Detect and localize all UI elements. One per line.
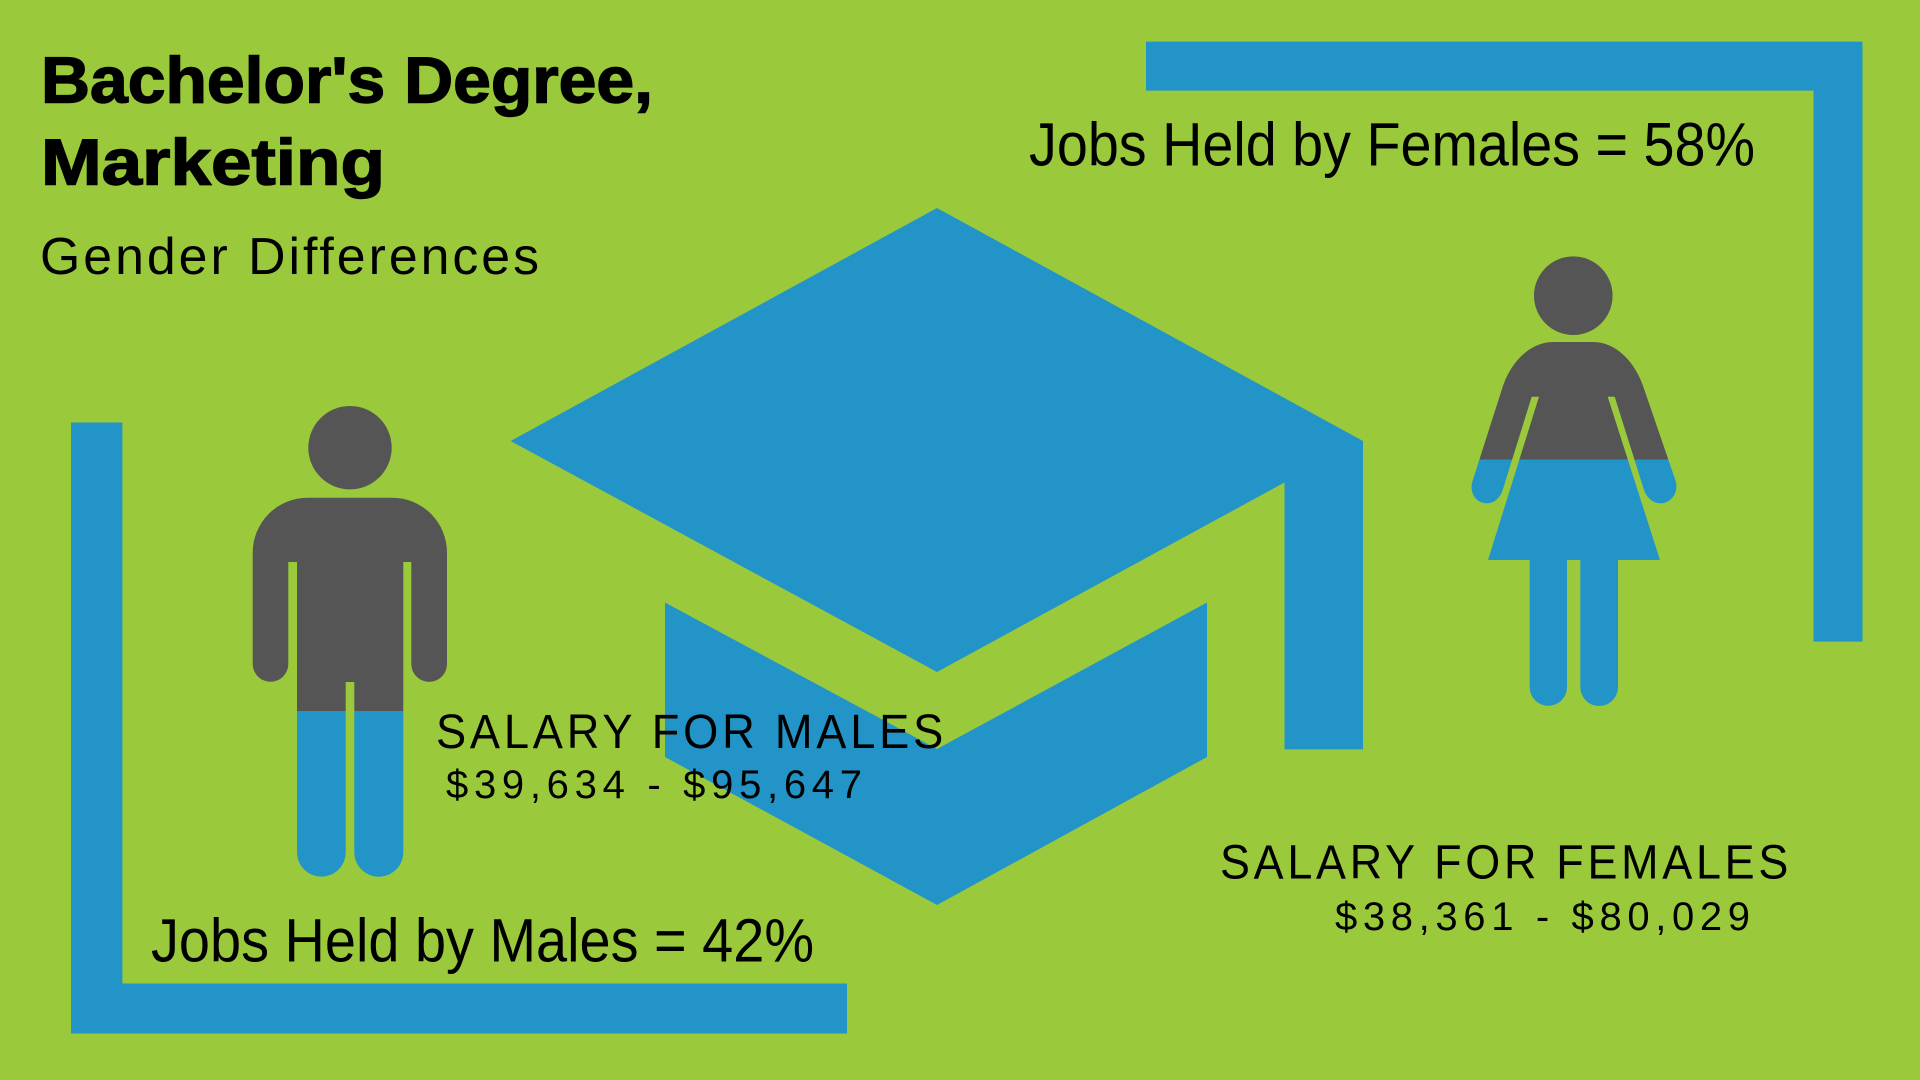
frame: bottom-left corner bracket: [71, 422, 847, 1034]
frame: top-right corner bracket: [1146, 42, 1862, 642]
icon: graduation cap: [511, 208, 1363, 905]
label: salary for females: SALARY FOR FEMALES: [1220, 836, 1792, 890]
title: [41, 44, 653, 198]
title: Marketing: [41, 126, 385, 198]
value: male salary range: $39,634 - $95,647: [446, 763, 862, 807]
icon: female figure 58% filled: [1472, 256, 1676, 706]
title: Bachelor's Degree,: [41, 44, 653, 116]
value: female salary range: $38,361 - $80,029: [1335, 895, 1750, 939]
label: salary for males: SALARY FOR MALES: [436, 706, 947, 759]
icon: male figure 42% filled: [253, 406, 447, 877]
stat: jobs held by males: Jobs Held by Males = 42%: [151, 906, 814, 974]
subtitle: Gender Differences: [40, 228, 542, 286]
stat: jobs held by females: Jobs Held by Females = 58%: [1029, 110, 1755, 178]
